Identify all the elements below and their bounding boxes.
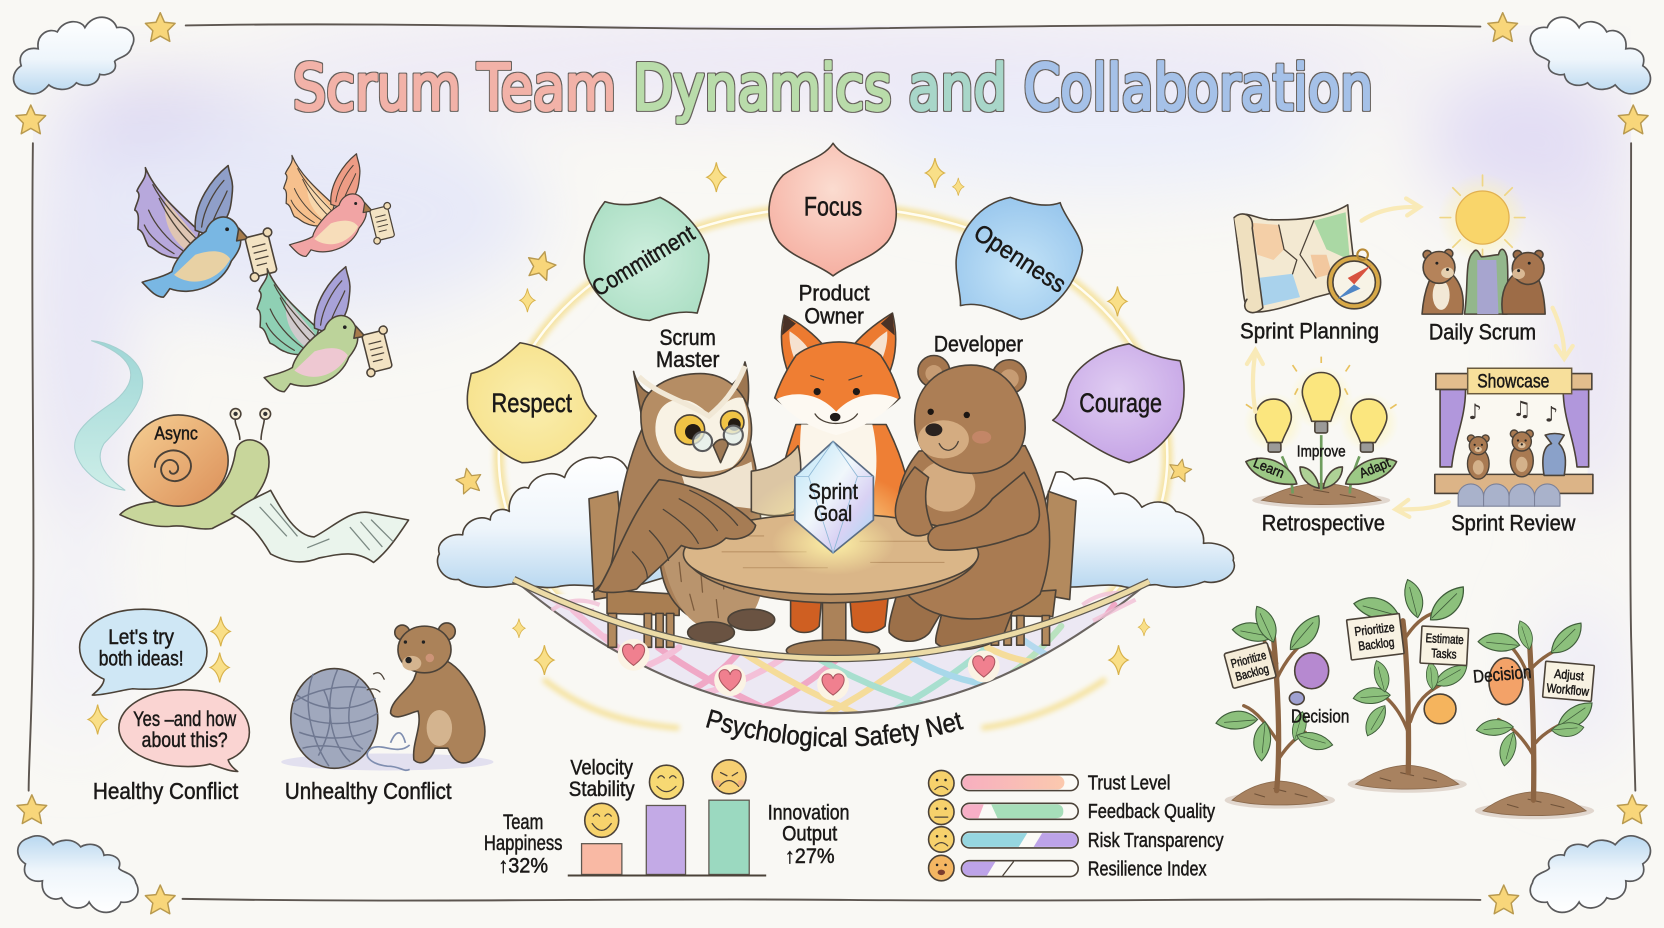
branches [1498, 641, 1575, 756]
label: Decision [1472, 662, 1532, 687]
branches [1374, 603, 1443, 732]
owl: scrum master [592, 362, 801, 643]
label: velocity stability [569, 757, 635, 801]
soil [1475, 792, 1594, 819]
bars [582, 800, 749, 874]
arrow: planning to daily [1362, 198, 1420, 221]
label: Sprint Planning [1240, 319, 1379, 344]
leaves [1216, 605, 1334, 762]
role label: product owner [799, 280, 870, 329]
fruit: small [1289, 692, 1304, 705]
performers [1467, 430, 1565, 479]
face: happy [585, 803, 619, 837]
sparkles around values [454, 158, 1193, 675]
bulb right [1339, 393, 1399, 452]
shell [128, 415, 228, 506]
label: innovation output: Innovation [768, 801, 850, 824]
icon: compass [1328, 249, 1381, 309]
text: adapt: Adapt [1357, 455, 1392, 481]
shadow [281, 753, 493, 770]
bear arm right [928, 472, 1039, 550]
music notes: ♪ [1468, 400, 1482, 425]
label: team happiness: Team [503, 811, 543, 834]
bulb rays [1246, 357, 1397, 409]
sign: prioritize backlog: Backlog [1234, 662, 1270, 684]
table pedestal [822, 600, 846, 647]
chair: bear [991, 491, 1076, 645]
net rim inner [514, 579, 1149, 658]
branches [1244, 628, 1312, 759]
title: Scrum Team Dynamics and Collaboration [293, 51, 1373, 125]
decision tree three [1472, 621, 1597, 819]
lower arch glow right [982, 679, 1106, 728]
metric: feedback quality [929, 799, 1216, 825]
petal: openness [956, 197, 1082, 319]
sign: adjust workflow: Adjust [1554, 666, 1585, 684]
snail foot [120, 440, 269, 529]
arrow: review to retrospective [1396, 500, 1449, 517]
back net strands [541, 590, 1136, 621]
sign: adjust workflow [1543, 661, 1594, 701]
label: velocity stability: Velocity [570, 757, 633, 780]
role label: developer: Developer [934, 331, 1024, 356]
paper mask below the arch [467, 594, 1199, 743]
table base [786, 640, 880, 661]
owl wing [597, 480, 756, 592]
music notes: ♪ [1545, 402, 1558, 427]
owl eyes [675, 411, 744, 445]
sign: prioritize backlog: Prioritize [1353, 619, 1395, 639]
icon: sun [1438, 173, 1527, 262]
trunk [1529, 637, 1534, 800]
fox muzzle [777, 394, 898, 435]
petal: respect: Respect [491, 388, 573, 418]
axis [568, 875, 766, 877]
paper trail [231, 490, 409, 562]
corner cloud bottom left [18, 836, 138, 912]
face: frowning [712, 760, 746, 794]
bear ears [918, 356, 1026, 394]
petal: courage: Courage [1079, 388, 1162, 418]
label: Unhealthy Conflict [285, 778, 452, 804]
sign: estimate tasks: Tasks [1431, 645, 1457, 662]
small bear body [391, 656, 485, 763]
sign text: Showcase [1477, 371, 1549, 392]
metric: risk transparency [929, 827, 1224, 852]
tentacles [235, 416, 264, 439]
net bowl outline [514, 579, 1149, 713]
bubble text: Yes –and how [133, 708, 237, 731]
scrum values petals [467, 143, 1184, 463]
owl ear tufts [634, 362, 749, 419]
bear legs [889, 573, 1019, 650]
happiness bar chart [484, 757, 850, 877]
role label: scrum master [656, 325, 720, 372]
soil [1252, 483, 1390, 508]
owl body [592, 409, 764, 628]
fox face [811, 376, 862, 423]
label second line: Goal [814, 501, 852, 526]
soil [1348, 765, 1467, 793]
curtains [1440, 389, 1589, 467]
petal: openness: Openness [969, 219, 1071, 299]
leaf: learn [1246, 458, 1297, 484]
face: smiling [649, 765, 683, 799]
sprint cycle [1234, 173, 1593, 536]
trunk [1272, 626, 1279, 791]
cloud right [1019, 472, 1234, 588]
plant stems [1282, 435, 1359, 493]
leaves mid [1300, 467, 1342, 488]
unhealthy conflict [281, 623, 493, 804]
fruit: plum [1295, 653, 1329, 689]
bulb middle [1289, 366, 1353, 433]
eyes [230, 409, 271, 419]
corner cloud bottom right [1530, 836, 1650, 912]
petal: commitment: Commitment [587, 220, 699, 301]
bear head [915, 365, 1025, 473]
sign: prioritize backlog: Backlog [1357, 634, 1395, 653]
small bear belly [427, 710, 452, 746]
sign: prioritize backlog: Prioritize [1229, 648, 1268, 671]
top beam [1436, 374, 1592, 389]
role label: scrum master: Master [656, 347, 720, 372]
bear: developer [889, 356, 1050, 650]
fox: product owner [775, 313, 913, 632]
healthy conflict [80, 609, 249, 804]
label: Retrospective [1262, 511, 1385, 536]
net label curve path [703, 726, 966, 747]
small bear face [367, 640, 434, 692]
owl arm on fox [751, 446, 801, 516]
bear body [898, 446, 1050, 619]
role label: product owner: Product [799, 280, 870, 305]
yarn strands [293, 670, 378, 766]
fox chest [800, 424, 876, 520]
owl beak [713, 439, 728, 463]
leaf: adapt [1346, 458, 1397, 484]
label: Sprint [808, 479, 859, 504]
crystal facets [795, 441, 873, 553]
corner cloud top right [1530, 17, 1650, 94]
petal: commitment [584, 197, 709, 320]
role label: product owner: Owner [804, 304, 864, 329]
owl fur strokes [679, 562, 743, 618]
label: Healthy Conflict [93, 778, 239, 804]
petal: focus [769, 143, 896, 276]
text: learn: Learn [1251, 455, 1286, 481]
hearts on net [618, 639, 1000, 700]
label: Sprint Review [1451, 511, 1576, 536]
shell spiral [155, 450, 191, 481]
fruit [1489, 658, 1523, 705]
label: team happiness: ↑32% [498, 854, 548, 877]
metric: trust level: Trust Level [1088, 773, 1171, 795]
label: innovation output [768, 801, 850, 868]
metric: risk transparency: Risk Transparency [1088, 830, 1224, 852]
owl wing feathers [632, 490, 738, 578]
icon: green bird [257, 267, 397, 392]
decision tree two [1347, 579, 1472, 793]
sprint planning map [1234, 205, 1356, 313]
crystal shape [795, 441, 873, 553]
petal: focus: Focus [804, 191, 862, 221]
arrow: retrospective to planning [1247, 350, 1263, 412]
sign: prioritize backlog [1347, 613, 1404, 660]
owl belly [679, 462, 758, 509]
yarn ball [291, 669, 378, 768]
corner cloud top left [14, 17, 134, 94]
table inner glow [772, 512, 895, 575]
role label: scrum master: Scrum [660, 325, 716, 350]
bubble text: Let's try [108, 626, 174, 649]
bubble: blue [80, 609, 207, 695]
label: team happiness: Happiness [484, 832, 562, 855]
label: velocity stability: Stability [569, 778, 635, 801]
metric: feedback quality: Feedback Quality [1088, 801, 1216, 823]
label: team happiness [484, 811, 562, 877]
owl glasses [693, 426, 743, 451]
metric: resilience index [929, 855, 1207, 881]
retrospective lightbulbs [1244, 357, 1399, 508]
trunk [1403, 621, 1409, 773]
label: innovation output: ↑27% [785, 845, 835, 868]
fox legs [791, 587, 889, 632]
label: Async [154, 423, 198, 443]
bear arm left [895, 467, 934, 536]
net label: Psychological Safety Net [706, 709, 964, 752]
sign: adjust workflow: Workflow [1546, 680, 1590, 699]
bubble: pink [119, 690, 249, 772]
stage backdrop [1441, 388, 1588, 478]
fox inner ears [789, 331, 887, 366]
net rim [514, 579, 1149, 658]
table wood grain [706, 536, 944, 568]
bubble text second line: both ideas! [99, 647, 184, 670]
round table [683, 512, 978, 661]
metric: resilience index: Resilience Index [1088, 859, 1207, 881]
chair: owl [589, 491, 679, 647]
bubble text second line: about this? [142, 729, 228, 752]
soil [1225, 781, 1335, 809]
sign: estimate tasks [1420, 626, 1469, 666]
icon: blue bird [135, 166, 282, 297]
decision tree one [1216, 605, 1349, 809]
fox ear tips [782, 313, 895, 335]
values arch glow [499, 207, 1167, 706]
music notes [1468, 397, 1558, 427]
metric: trust level [929, 770, 1171, 796]
teal stream [75, 341, 143, 490]
fruit: orange [1424, 694, 1456, 724]
showcase stage [1435, 368, 1593, 506]
psychological safety net back [530, 592, 1132, 712]
sparkles [88, 617, 230, 734]
cloud left [437, 457, 679, 588]
petal: respect [467, 343, 596, 463]
tangled thread [367, 733, 410, 770]
messenger birds with scrolls [135, 154, 399, 392]
table top [683, 514, 978, 594]
owl head [641, 374, 752, 478]
petal: courage [1053, 344, 1184, 463]
stage floor [1435, 474, 1593, 493]
bear muzzle and face [918, 409, 991, 458]
table glow [743, 470, 923, 602]
owl feet [688, 609, 775, 643]
music notes: ♫ [1512, 397, 1531, 422]
health metrics progress bars [929, 770, 1224, 881]
watercolor wash background [32, 19, 1634, 764]
sprint goal crystal [795, 441, 873, 553]
daily scrum huddle [1422, 249, 1545, 314]
fox head [775, 342, 900, 433]
audience arcs [1458, 484, 1560, 506]
bulb left [1244, 393, 1303, 452]
bear belly [918, 461, 975, 512]
lower arch glow left [543, 679, 679, 728]
fox body [779, 424, 913, 531]
small bear head [398, 626, 451, 673]
arrow: daily to review [1553, 308, 1573, 359]
fox ear right [851, 313, 896, 384]
label: Daily Scrum [1429, 320, 1536, 345]
text: improve: Improve [1297, 443, 1346, 460]
sign: estimate tasks: Estimate [1425, 630, 1464, 647]
fox ears [781, 315, 826, 384]
owl brows [639, 366, 745, 416]
label: innovation output: Output [782, 822, 837, 845]
label: Decision [1291, 707, 1349, 727]
icon: pink bird [284, 154, 399, 256]
small bear ears [395, 623, 455, 640]
leaves [1476, 621, 1597, 767]
sign: prioritize backlog [1224, 642, 1276, 689]
owl face disc [655, 397, 748, 472]
table edge [684, 554, 978, 603]
showcase sign [1468, 368, 1572, 394]
async snail with scroll [75, 341, 409, 562]
owl legs fur [660, 547, 764, 628]
leaves [1353, 579, 1472, 737]
central clouds [437, 457, 1234, 588]
